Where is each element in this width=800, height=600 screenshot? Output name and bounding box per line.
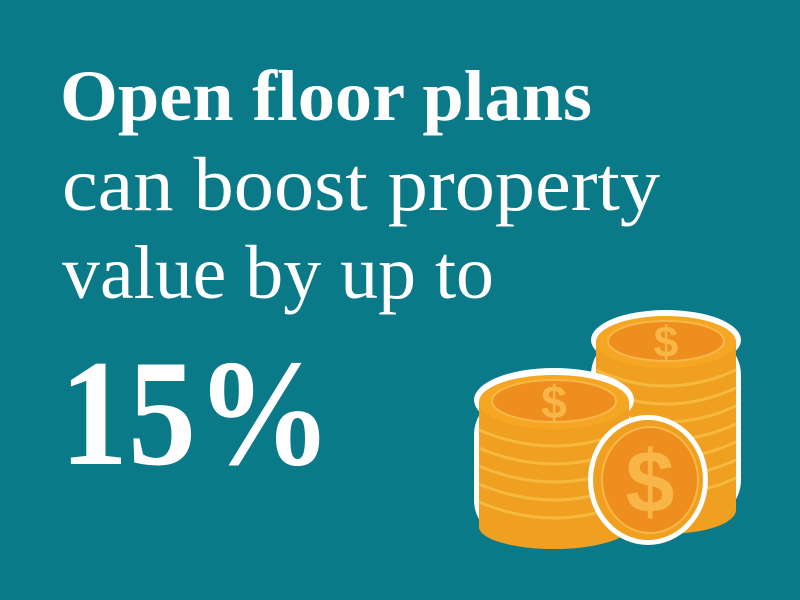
icon: coin stacks	[474, 310, 741, 549]
front coin: $	[626, 432, 674, 531]
right stack	[591, 310, 741, 534]
left stack	[474, 368, 634, 549]
front coin	[588, 415, 708, 545]
big number: 15%	[60, 329, 332, 497]
left stack: $	[541, 376, 567, 428]
title line 1: Open floor plans	[60, 56, 592, 136]
right stack: $	[654, 318, 678, 367]
title line 2: can boost property	[62, 143, 660, 227]
title line 3: value by up to	[62, 231, 494, 315]
